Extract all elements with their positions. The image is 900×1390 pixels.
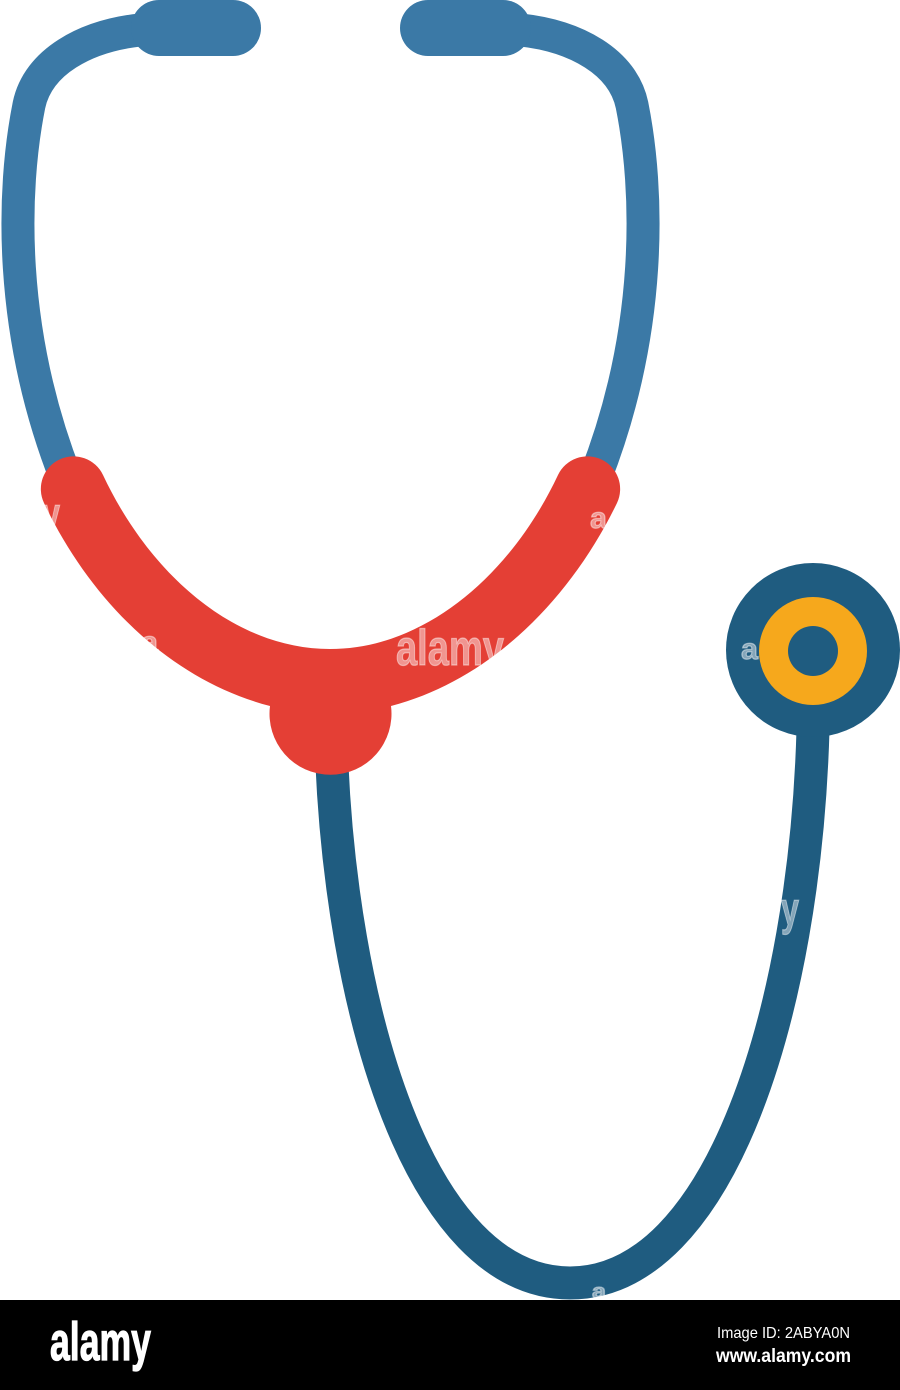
left earpiece: [131, 0, 261, 56]
watermarks: a: [141, 626, 158, 659]
watermarks: y: [42, 488, 60, 540]
footer bar: [0, 1300, 900, 1390]
watermarks: a: [590, 502, 607, 535]
image id: Image ID: 2ABYA0N: [717, 1325, 850, 1342]
footer logo: alamy: [50, 1312, 151, 1372]
website: www.alamy.com: [715, 1346, 851, 1367]
watermarks: alamy: [396, 620, 504, 676]
red headset yoke: [41, 456, 620, 775]
watermarks: [42, 488, 799, 1303]
right earpiece: [400, 0, 531, 56]
watermarks: a: [741, 633, 758, 666]
chest piece: [726, 563, 900, 737]
right ear tube: [521, 30, 643, 478]
left ear tube: [18, 30, 140, 478]
lower tube: [331, 730, 813, 1283]
watermarks: y: [781, 883, 799, 935]
watermarks: a: [592, 1281, 607, 1303]
